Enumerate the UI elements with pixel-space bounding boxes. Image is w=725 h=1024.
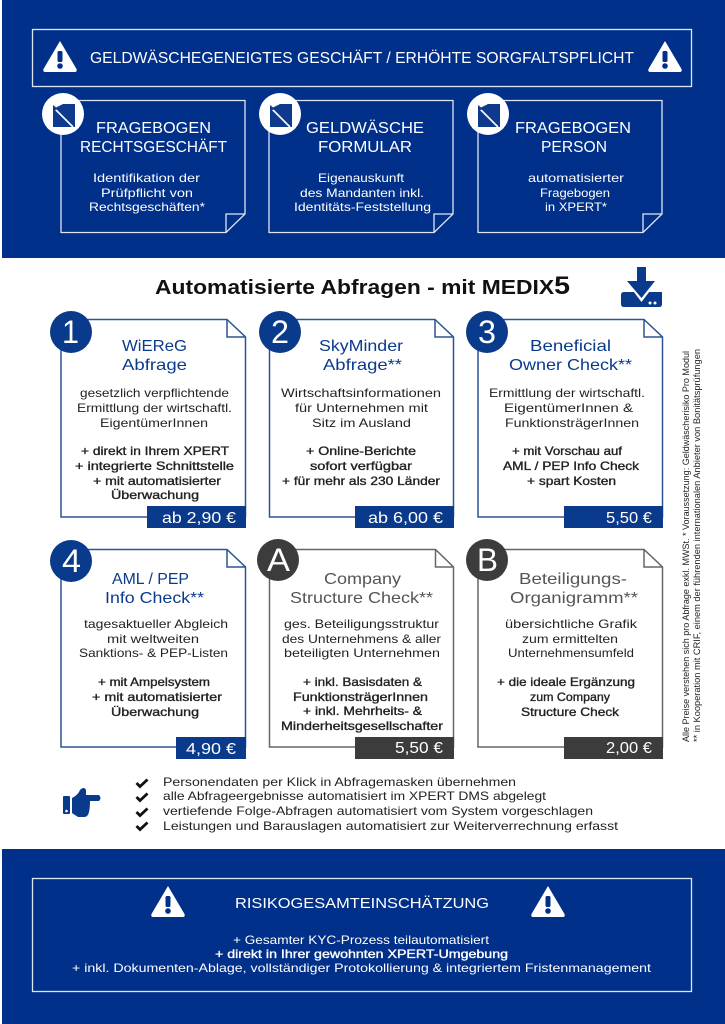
card A: Company Structure Check: Company <box>324 571 401 588</box>
card 2: SkyMinder: ab 6,00 € <box>368 510 443 527</box>
card 3: Beneficial Owner Check: 3 <box>478 314 496 350</box>
card 1: WiEReG: + direkt in Ihrem XPERT <box>81 444 230 458</box>
card 4: AML / PEP: Sanktions- & PEP-Listen <box>79 646 228 660</box>
card: Geldwäsche Formular: GELDWÄSCHE <box>306 120 424 137</box>
checklist: Personendaten per Klick in Abfragemasken übernehmen <box>163 775 516 789</box>
card B: Beteiligungs-Organigramm: Unternehmensumfeld <box>508 646 634 660</box>
card 4: AML / PEP: 4 <box>62 543 81 579</box>
card 2: SkyMinder: sofort verfügbar <box>310 459 412 473</box>
card B: Beteiligungs-Organigramm: zum Company <box>530 690 610 704</box>
card A: Company Structure Check: Structure Check** <box>290 590 433 607</box>
card 3: Beneficial Owner Check: + mit Vorschau auf <box>512 444 623 458</box>
bottom panel: Risikogesamteinschätzung: + inkl. Dokumenten-Ablage, vollständiger Protokollierung & integriertem Fristenmanagement <box>72 961 652 975</box>
heading: RISIKOGESAMTEINSCHÄTZUNG <box>235 895 489 912</box>
footnote (rotated) <box>681 349 702 742</box>
card: Fragebogen Person: automatisierter <box>528 171 624 185</box>
top panel: Geldwäsche <box>2 0 725 258</box>
icon: warning left <box>151 886 185 917</box>
header text: GELDWÄSCHEGENEIGTES GESCHÄFT / ERHÖHTE SORGFALTSPFLICHT <box>90 49 634 67</box>
card 1: WiEReG: Abfrage <box>122 357 187 374</box>
card 1: WiEReG: ab 2,90 € <box>162 510 236 527</box>
card 3: Beneficial Owner Check: + spart Kosten <box>527 474 616 488</box>
card 3: Beneficial Owner Check: FunktionsträgerInnen <box>505 416 639 430</box>
card 4: AML / PEP: 4,90 € <box>186 741 236 758</box>
card: Geldwäsche Formular: FORMULAR <box>318 139 412 156</box>
card A: Company Structure Check: 5,50 € <box>395 740 443 757</box>
card 4: AML / PEP: Info Check** <box>105 590 204 607</box>
card 3: Beneficial Owner Check: EigentümerInnen & <box>504 401 633 415</box>
card 4: AML / PEP: AML / PEP <box>112 571 189 588</box>
card: Fragebogen Person <box>467 93 662 232</box>
card: Geldwäsche Formular <box>259 93 453 232</box>
card A: Company Structure Check: + inkl. Mehrheits- & <box>303 704 422 718</box>
card 4: AML / PEP: tagesaktueller Abgleich <box>84 617 228 631</box>
card: Fragebogen Rechtsgeschäft: Prüfpflicht von <box>101 186 193 200</box>
card 2: SkyMinder: Wirtschaftsinformationen <box>281 386 441 400</box>
card: Geldwäsche Formular: Identitäts-Feststellung <box>294 200 431 214</box>
card 2: SkyMinder: + für mehr als 230 Länder <box>282 474 440 488</box>
card 3: Beneficial Owner Check: Ermittlung der wirtschaftl. <box>489 386 645 400</box>
card 1: WiEReG: + mit automatisierter <box>93 474 221 488</box>
card 3: Beneficial Owner Check: AML / PEP Info Check <box>503 459 640 473</box>
card B: Beteiligungs-Organigramm: + die ideale Ergänzung <box>497 675 635 689</box>
card: Fragebogen Rechtsgeschäft: Identifikation der <box>93 171 200 185</box>
card 4: AML / PEP: mit weltweiten <box>107 632 199 646</box>
header box <box>32 30 692 86</box>
card B: Beteiligungs-Organigramm: B <box>477 542 498 578</box>
card B: Beteiligungs-Organigramm: Structure Check <box>521 705 620 719</box>
card 1: WiEReG: Überwachung <box>111 488 199 502</box>
card B: Beteiligungs-Organigramm: 2,00 € <box>606 740 652 757</box>
icon: warning right <box>648 41 682 72</box>
bottom panel: Risikogesamteinschätzung <box>2 849 725 1024</box>
checklist: alle Abfrageergebnisse automatisiert im XPERT DMS abgelegt <box>163 789 547 803</box>
icon: warning right <box>531 886 565 917</box>
card: Fragebogen Person: PERSON <box>541 139 607 156</box>
card 1: WiEReG: + integrierte Schnittstelle <box>75 459 234 473</box>
title: Automatisierte Abfragen - mit MEDIX 5 <box>155 272 570 300</box>
card B: Beteiligungs-Organigramm: übersichtliche Grafik <box>505 617 638 631</box>
card 4: AML / PEP: + mit automatisierter <box>92 690 222 704</box>
icon: pointing hand <box>63 788 100 817</box>
footnote (rotated): Alle Preise verstehen sich pro Abfrage exkl. MWSt. * Voraussetzung: Geldwäscherisiko Pro Modul <box>681 351 691 742</box>
card A: Company Structure Check: ges. Beteiligungsstruktur <box>284 617 439 631</box>
card A: Company Structure Check: A <box>267 542 291 578</box>
card 1: WiEReG: Ermittlung der wirtschaftl. <box>77 401 232 415</box>
card 1: WiEReG: EigentümerInnen <box>100 416 208 430</box>
card: Fragebogen Rechtsgeschäft: RECHTSGESCHÄFT <box>80 139 228 156</box>
card 2: SkyMinder: Sitz im Ausland <box>312 416 411 430</box>
card 3: Beneficial Owner Check: Owner Check** <box>509 357 632 374</box>
card A: Company Structure Check: FunktionsträgerInnen <box>293 690 428 704</box>
card 2: SkyMinder: Abfrage** <box>323 357 402 374</box>
card 3: Beneficial Owner Check: 5,50 € <box>606 510 652 527</box>
card 4: AML / PEP <box>50 540 246 759</box>
card 3: Beneficial Owner Check: Beneficial <box>530 338 611 355</box>
checklist: vertiefende Folge-Abfragen automatisiert vom System vorgeschlagen <box>163 804 593 818</box>
checklist <box>136 775 619 833</box>
card 1: WiEReG: 1 <box>62 314 79 350</box>
card 1: WiEReG <box>50 311 246 528</box>
card 4: AML / PEP: + mit Ampelsystem <box>98 675 210 689</box>
card: Fragebogen Rechtsgeschäft: Rechtsgeschäften* <box>89 200 205 214</box>
card: Geldwäsche Formular: Eigenauskunft <box>318 171 405 185</box>
card: Fragebogen Rechtsgeschäft: FRAGEBOGEN <box>96 120 211 137</box>
card 3: Beneficial Owner Check <box>466 311 663 528</box>
bottom panel: Risikogesamteinschätzung: + direkt in Ihrer gewohnten XPERT-Umgebung <box>215 947 508 961</box>
text lines: + Gesamter KYC-Prozess teilautomatisiert <box>233 933 490 947</box>
card 2: SkyMinder: + Online-Berichte <box>306 444 416 458</box>
card: Fragebogen Person: FRAGEBOGEN <box>515 120 631 137</box>
card: Geldwäsche Formular: des Mandanten inkl. <box>300 186 424 200</box>
card: Fragebogen Person: Fragebogen <box>540 186 610 200</box>
card 2: SkyMinder: 2 <box>271 314 289 350</box>
card 1: WiEReG: gesetzlich verpflichtende <box>80 386 229 400</box>
card B: Beteiligungs-Organigramm: zum ermittelten <box>522 632 618 646</box>
checklist: Leistungen und Barauslagen automatisiert zur Weiterverrechnung erfasst <box>163 819 619 833</box>
card A: Company Structure Check: Minderheitsgesellschafter <box>281 719 443 733</box>
card A: Company Structure Check <box>257 539 454 759</box>
card 2: SkyMinder: für Unternehmen mit <box>295 401 429 415</box>
card 1: WiEReG: WiEReG <box>122 338 187 355</box>
card B: Beteiligungs-Organigramm <box>466 539 663 759</box>
card B: Beteiligungs-Organigramm: Organigramm** <box>510 590 638 607</box>
card: Fragebogen Person: in XPERT* <box>545 200 607 214</box>
icon: warning left <box>43 41 77 72</box>
card A: Company Structure Check: des Unternehmens & aller <box>282 632 441 646</box>
card 4: AML / PEP: Überwachung <box>111 705 199 719</box>
icon: download <box>621 267 662 307</box>
card: Fragebogen Rechtsgeschäft <box>42 93 245 232</box>
card A: Company Structure Check: beteiligten Unternehmen <box>284 646 440 660</box>
card A: Company Structure Check: + inkl. Basisdaten & <box>303 675 422 689</box>
card B: Beteiligungs-Organigramm: Beteiligungs- <box>519 571 627 588</box>
card 2: SkyMinder <box>259 311 454 528</box>
card 2: SkyMinder: SkyMinder <box>319 338 404 355</box>
footnote (rotated): ** in Kooperation mit CRIF, einem der führenden internationalen Anbieter von Bonitätsprüfungen <box>692 349 702 742</box>
